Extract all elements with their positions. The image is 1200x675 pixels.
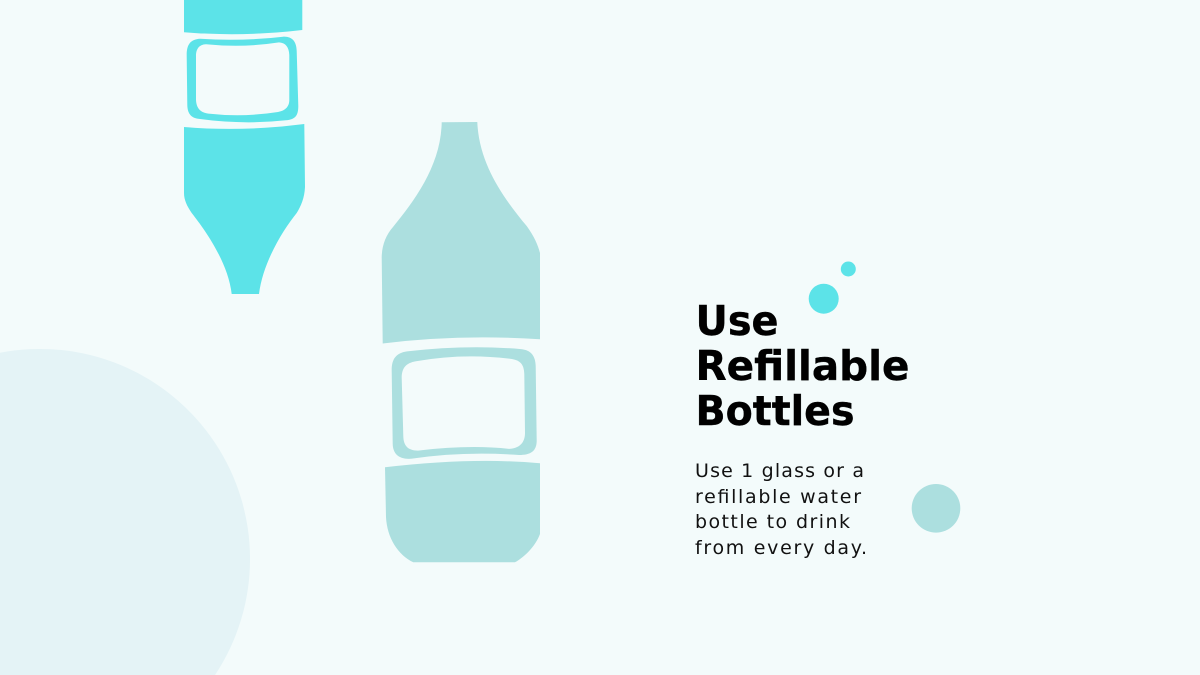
- teal large bubble: [912, 484, 960, 533]
- cyan bottle neck and shoulder: [184, 124, 305, 294]
- body text: refillable water: [695, 486, 861, 508]
- body text: from every day.: [695, 537, 867, 559]
- heading: Refillable: [696, 342, 910, 390]
- heading: Bottles: [696, 387, 854, 435]
- cyan bottle base section: [184, 0, 302, 34]
- body text: Use 1 glass or a: [695, 460, 864, 482]
- teal bottle label frame: [392, 347, 537, 459]
- body text: bottle to drink: [695, 511, 850, 533]
- cyan bottle label frame: [187, 37, 298, 122]
- teal bottle base section: [385, 461, 540, 562]
- cyan small bubble: [841, 262, 856, 276]
- body text: [695, 460, 867, 559]
- icon: teal bottle, upright: [382, 122, 540, 562]
- heading: [696, 297, 910, 435]
- teal bottle neck and shoulder: [382, 122, 540, 344]
- cyan medium bubble: [809, 284, 839, 314]
- icon: cyan bottle, upside down: [184, 0, 305, 294]
- background circle: [0, 349, 250, 675]
- heading: Use: [696, 297, 778, 345]
